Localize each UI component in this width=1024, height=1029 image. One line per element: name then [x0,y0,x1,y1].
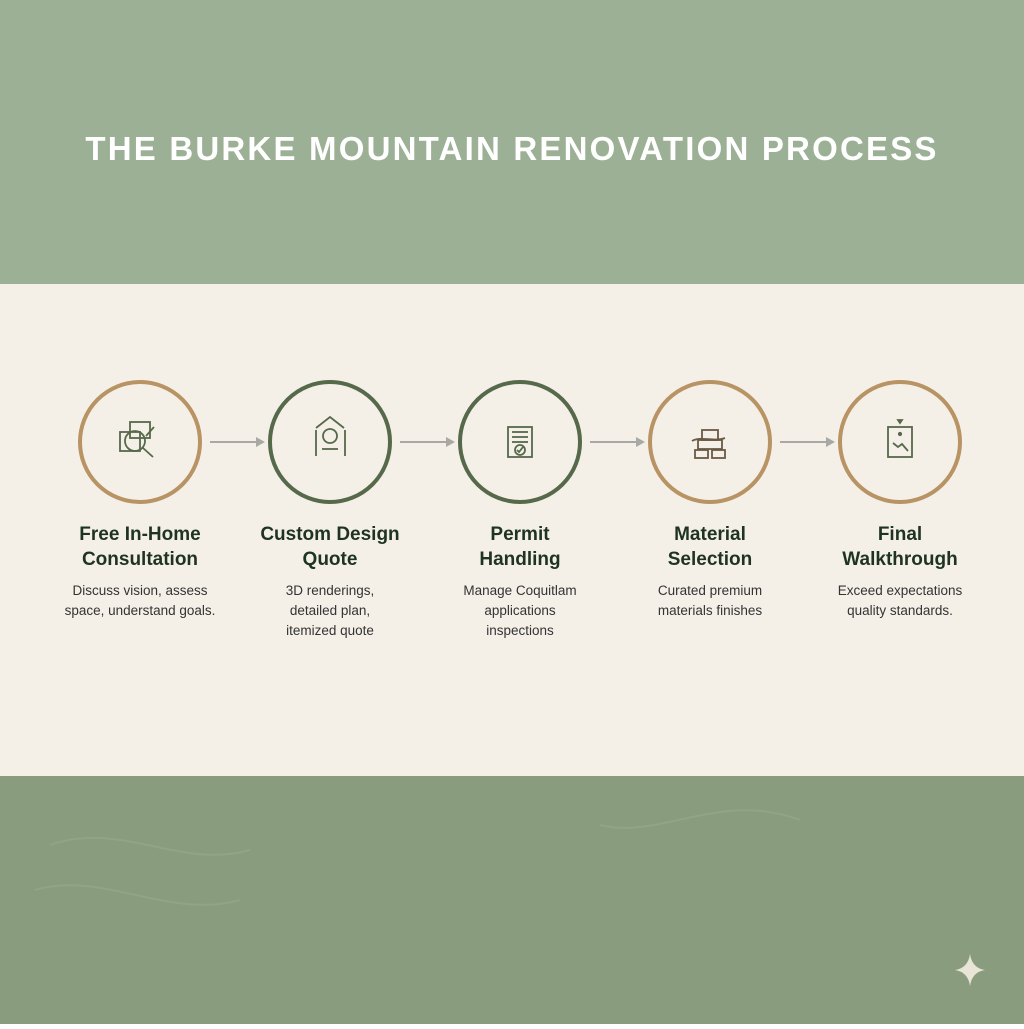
step 3: permit: Manage Coquitlam [463,583,577,598]
icon: house [316,417,345,456]
icon: magnifier [120,422,154,457]
step 2: design quote: itemized quote [286,623,374,638]
step 5: walkthrough [838,382,963,618]
step 5: walkthrough: Final [878,524,922,545]
step 2: design quote: detailed plan, [290,603,370,618]
step 2: design quote: 3D renderings, [286,583,374,598]
step 2: design quote: Custom Design [260,524,400,545]
step 1: consultation: space, understand goals. [65,603,215,618]
step 5: walkthrough: Exceed expectations [838,583,963,598]
icon: material blocks [692,430,725,458]
step 3: permit: Permit [490,524,550,545]
icon: frame [888,420,912,457]
icon: document [508,427,532,457]
icon: sparkle [955,954,985,986]
step 1: consultation [65,382,215,618]
step 3: permit: Handling [479,549,561,570]
panel: footer band [0,776,1024,1024]
step 4: materials: Selection [668,549,752,570]
step 5: walkthrough: quality standards. [847,603,953,618]
step 1: consultation: Free In-Home [79,524,201,545]
arrows [210,437,835,447]
step 5: walkthrough: Walkthrough [842,549,958,570]
step 1: consultation: Discuss vision, assess [72,583,208,598]
step 2: design quote: Quote [303,549,357,570]
step 1: consultation: Consultation [82,549,198,570]
step 3: permit [460,382,580,638]
step 4: materials: Material [674,524,746,545]
panel: content area [0,284,1024,776]
step 4: materials: materials finishes [658,603,762,618]
step 3: permit: inspections [486,623,554,638]
step 2: design quote [260,382,400,638]
title: THE BURKE MOUNTAIN RENOVATION PROCESS [85,130,939,167]
panel: header band [0,0,1024,284]
step 3: permit: applications [484,603,556,618]
step 4: materials: Curated premium [658,583,762,598]
step 4: materials [650,382,770,618]
